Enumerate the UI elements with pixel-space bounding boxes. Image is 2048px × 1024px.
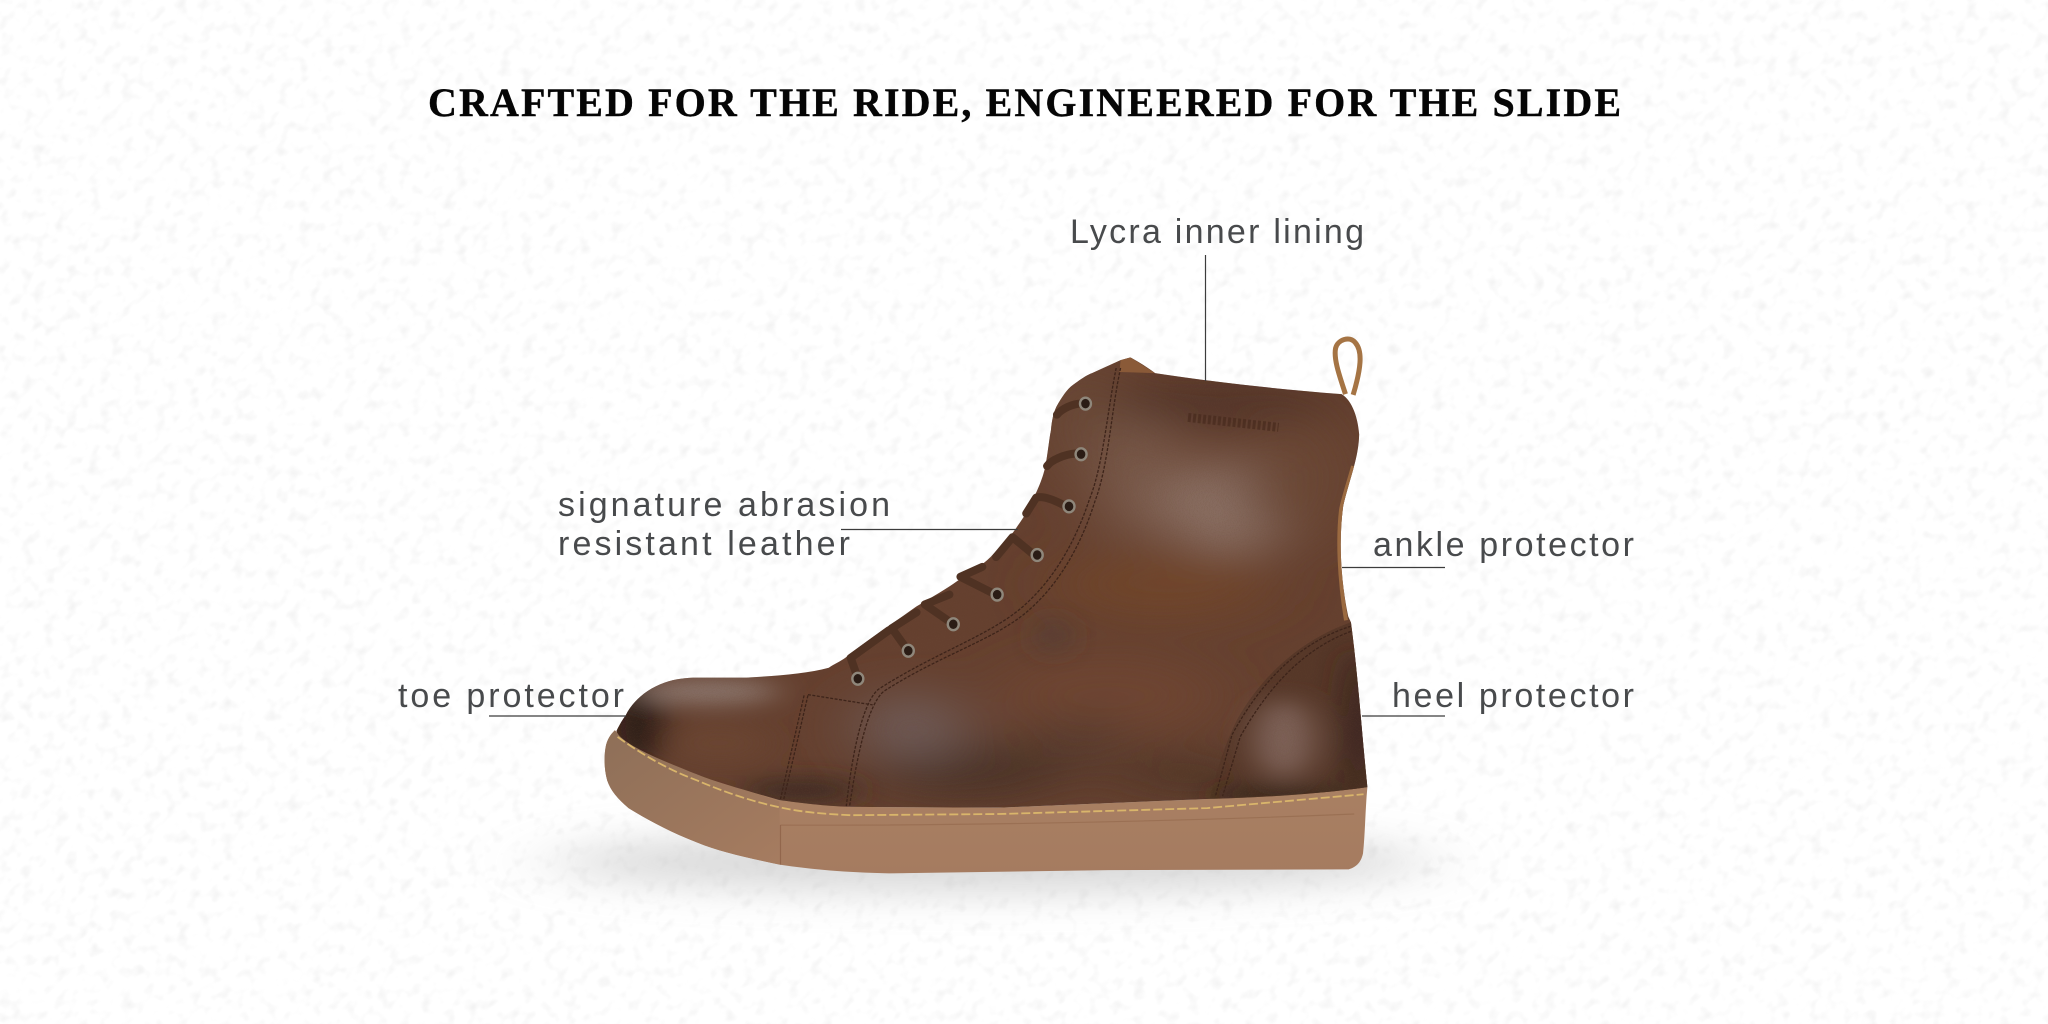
boot upper (593, 347, 1383, 822)
ground shadow (550, 830, 1430, 894)
leather shading (856, 359, 1350, 798)
callout: Lycra inner lining: Lycra inner lining (1070, 213, 1364, 251)
logo emboss (1188, 417, 1279, 427)
icon: pull loop (1335, 339, 1360, 395)
eyelets (852, 398, 1091, 685)
stitching seams (780, 368, 1351, 806)
callout: signature abrasion resistant leather: resistant leather (558, 525, 850, 563)
tongue (1119, 357, 1155, 373)
heel counter (1224, 622, 1368, 793)
laces (851, 404, 1081, 674)
boot illustration (593, 339, 1383, 873)
callout: heel protector: heel protector (1392, 677, 1634, 715)
callout: signature abrasion resistant leather: signature abrasion (558, 486, 890, 524)
callout: ankle protector: ankle protector (1373, 526, 1634, 564)
callout: toe protector: toe protector (398, 677, 624, 715)
sole (605, 730, 1367, 873)
leather grain (622, 446, 1360, 750)
back seam strip (1339, 466, 1353, 620)
title: CRAFTED FOR THE RIDE, ENGINEERED FOR THE SLIDE (428, 80, 1621, 125)
callout: signature abrasion resistant leather (558, 486, 1018, 563)
